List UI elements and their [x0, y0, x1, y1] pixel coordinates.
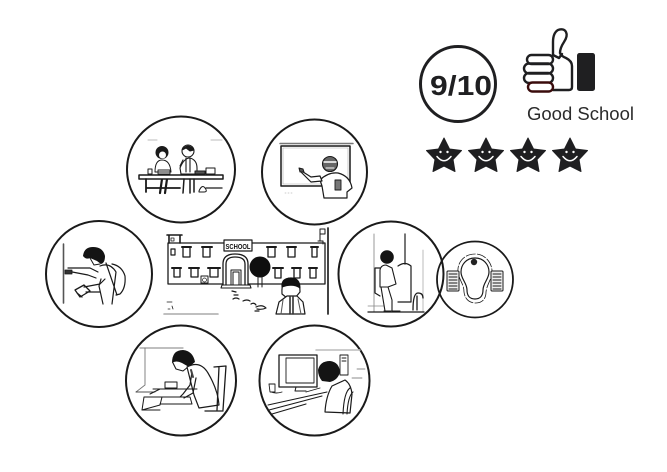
- score badge: 9/10: 9/10: [430, 70, 492, 101]
- panel: students at a bench: [127, 116, 235, 222]
- label: Good School: Good School: [527, 104, 634, 124]
- panel: teacher at the blackboard: [262, 120, 367, 224]
- panel: student at a computer: [260, 326, 370, 436]
- illustration: school building and student: [164, 228, 328, 314]
- star rating: four smiling stars: [426, 138, 588, 172]
- icon: thumbs up: [524, 29, 595, 91]
- illustration: school building and student: SCHOOL: [226, 242, 251, 251]
- panel: student washing hands: [46, 221, 152, 327]
- panel: student at the urinal: [338, 222, 444, 326]
- panel: squat toilet: [437, 242, 513, 318]
- panel: student writing at a desk: [126, 326, 236, 436]
- score badge: 9/10: [420, 46, 496, 122]
